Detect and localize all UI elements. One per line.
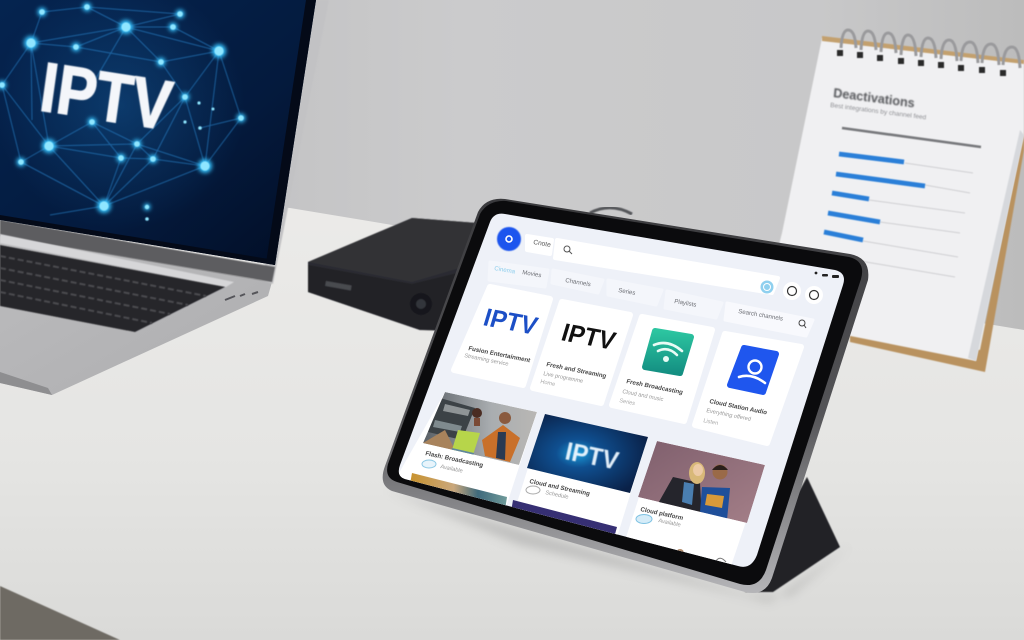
media card three: Cloud platform [639, 506, 685, 522]
category tabs: Search channels [738, 308, 784, 323]
app card: blue IPTV [454, 287, 550, 385]
laptop deck [0, 235, 272, 395]
brand circle [497, 227, 521, 251]
laptop lid frame [262, 0, 329, 284]
app card: blue person: Everything offered [705, 408, 752, 423]
icon: wifi app [645, 331, 691, 373]
laptop hinge [0, 220, 275, 282]
keyboard [0, 245, 225, 332]
photo: two people [423, 392, 537, 470]
top pill [527, 236, 552, 254]
chart axis line [842, 128, 981, 147]
media card two: Schedule [544, 490, 569, 501]
cable behind tablet [590, 208, 632, 214]
status icons [815, 272, 839, 278]
tablet stand [745, 477, 840, 592]
app card: wifi: Cloud and music [621, 389, 664, 403]
network mesh [2, 7, 241, 215]
category tabs [489, 262, 813, 336]
round button two [805, 286, 823, 304]
blue app button [760, 280, 774, 294]
app card: black IPTV: IPTV [558, 319, 619, 356]
tablet [380, 199, 868, 593]
media card one [395, 392, 537, 510]
tablet rim [383, 199, 868, 593]
search bar [555, 240, 778, 293]
app card: blue person: Cloud Station Audio [708, 398, 768, 416]
app card: wifi [612, 317, 712, 421]
app card: blue person [695, 334, 801, 443]
media card three [626, 441, 765, 564]
laptop IPTV logo: IPTV [36, 48, 177, 145]
laptop screen [0, 0, 316, 265]
app card: blue IPTV: Streaming service [463, 353, 509, 368]
paper page [760, 38, 1024, 361]
app card: blue IPTV: Fusion Entertainment [467, 345, 531, 364]
app card: wifi: Series [618, 398, 636, 407]
network nodes glow [0, 2, 246, 213]
photo: couple [638, 441, 765, 523]
keyboard highlight [0, 234, 234, 287]
app card: black IPTV [533, 302, 630, 403]
tablet shadow [385, 490, 850, 602]
category tabs: Series [618, 287, 636, 297]
image strip [410, 473, 507, 506]
chart bars [824, 154, 925, 240]
media card three: Available [657, 518, 681, 529]
media card two [512, 414, 648, 535]
chart guide lines [860, 163, 973, 277]
laptop [0, 0, 329, 395]
app card: black IPTV: Home [539, 379, 556, 388]
top pill: Cnote [533, 239, 552, 249]
notepad subtitle: Best integrations by channel feed [830, 102, 927, 122]
category tabs: Cinema [494, 265, 516, 276]
app card: wifi: Fresh Broadcasting [625, 378, 684, 396]
photo: IPTV glow [527, 414, 648, 493]
desk front edge [0, 586, 120, 640]
icon: blue app [730, 348, 776, 392]
tablet bezel [387, 201, 862, 585]
tablet screen [398, 214, 844, 567]
app card: black IPTV: Fresh and Streaming [545, 361, 607, 380]
purple strip [512, 500, 617, 534]
notepad with bar chart [760, 30, 1024, 372]
category tabs: Movies [522, 269, 542, 279]
box lens [410, 293, 432, 315]
laptop ports [225, 292, 258, 300]
background wall [0, 0, 1024, 340]
network nodes [0, 4, 244, 221]
media card one: Available [439, 464, 463, 475]
notepad title: Deactivations [833, 86, 915, 111]
desk surface [0, 180, 1024, 640]
media card two: Cloud and Streaming [528, 478, 591, 498]
media card one: Flash: Broadcasting [424, 450, 484, 469]
app card: blue person: Listen [702, 418, 719, 427]
category tabs: Channels [565, 277, 591, 288]
app card: black IPTV: Live programme [542, 371, 584, 385]
app card: blue IPTV: IPTV [480, 304, 541, 341]
category tabs: Playlists [674, 298, 697, 309]
wooden backing [850, 130, 1024, 372]
set-top box [308, 218, 490, 332]
round button one [783, 282, 801, 300]
media card two: IPTV [563, 438, 622, 476]
spiral binding [841, 30, 1020, 68]
